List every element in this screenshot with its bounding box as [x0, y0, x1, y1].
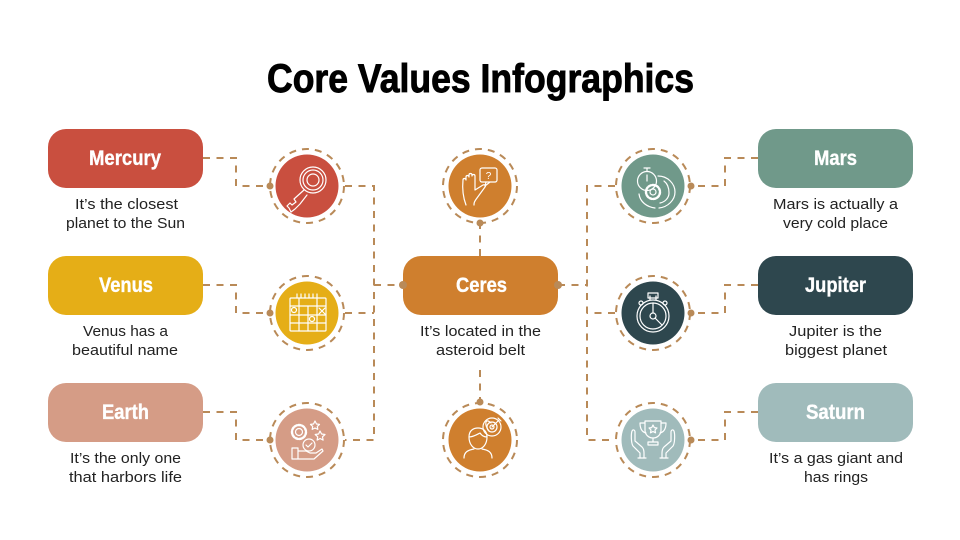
icon: calendar grid (Venus): [266, 276, 344, 350]
panel: Ceres: Ceres: [456, 274, 507, 297]
panel: Mars: very cold place: [783, 216, 888, 232]
title: Core Values Infographics: [267, 57, 694, 101]
panel: Earth: that harbors life: [69, 470, 182, 486]
connectors: centre: [479, 223, 481, 402]
icon: raised hand with question bubble (top centre): [443, 149, 517, 226]
panel: Earth: Earth: [102, 401, 149, 424]
icon: person with target (bottom centre): [443, 398, 517, 477]
panel: Mercury: It’s the closest: [75, 197, 178, 213]
icon: gear and hand (Earth): [266, 403, 344, 477]
icon: stopwatch and gear (Mars): [616, 149, 694, 223]
panel: Saturn: Saturn: [806, 401, 865, 424]
panel: Saturn: [758, 383, 913, 486]
panel: Venus: beautiful name: [72, 343, 178, 359]
panel: Venus: [48, 256, 203, 359]
connectors: right side: [558, 158, 758, 440]
panel: Jupiter: biggest planet: [785, 343, 887, 359]
icon: stopwatch (Jupiter): [616, 276, 694, 350]
panel: Mars: Mars is actually a: [773, 197, 899, 213]
panel: Venus: Venus has a: [83, 324, 169, 340]
panel: Mars: Mars: [814, 147, 857, 170]
connectors: left side: [203, 158, 403, 440]
panel: Jupiter: Jupiter is the: [789, 324, 882, 340]
panel: Earth: It’s the only one: [70, 451, 181, 467]
panel: Saturn: It’s a gas giant and: [769, 451, 903, 467]
panel: Mercury: Mercury: [89, 147, 161, 170]
panel: Earth: [48, 383, 203, 486]
panel: Ceres: [399, 256, 562, 359]
panel: Jupiter: Jupiter: [805, 274, 866, 297]
panel: Ceres: It’s located in the: [420, 324, 541, 340]
panel: Mercury: [48, 129, 203, 232]
panel: Mars: [758, 129, 913, 232]
icon: hands holding trophy (Saturn): [616, 403, 694, 477]
panel: Ceres: asteroid belt: [436, 343, 525, 359]
panel: Mercury: planet to the Sun: [66, 216, 185, 232]
icon: key with magnifier (Mercury): [266, 149, 344, 223]
panel: Saturn: has rings: [804, 470, 868, 486]
icon: raised hand with question bubble (top centre): ?: [486, 171, 492, 182]
panel: Venus: Venus: [99, 274, 153, 297]
panel: Jupiter: [758, 256, 913, 359]
